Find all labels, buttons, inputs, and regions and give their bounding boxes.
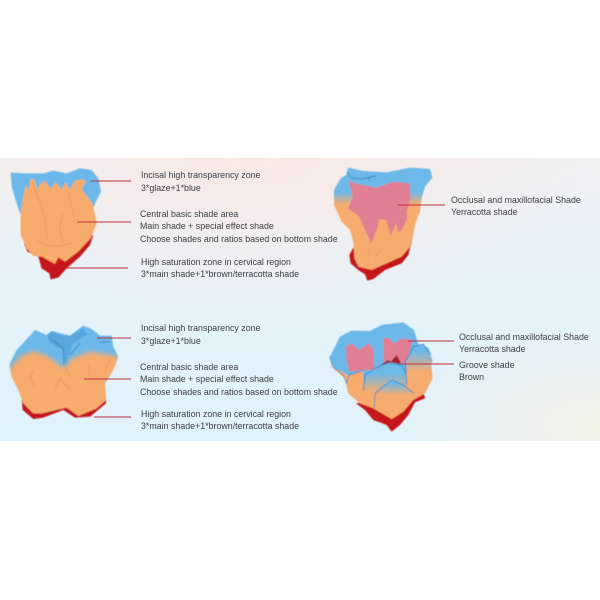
tooth body: [8, 325, 119, 417]
labels: bottom-left tooth, central zone: Main shade + special effect shade: [140, 374, 274, 384]
labels: top-right tooth: Yerracotta shade: [451, 207, 518, 217]
tooth body orange: [333, 355, 433, 419]
labels: bottom-left tooth, central zone: Choose shades and ratios based on bottom shade: [140, 387, 338, 397]
brown groove shade: [381, 355, 402, 365]
central orange zone: [21, 178, 97, 264]
pink occlusal zone: [348, 180, 411, 243]
labels: top-left tooth, central zone: Choose shades and ratios based on bottom shade: [140, 234, 338, 244]
labels: top-right tooth: Occlusal and maxillofacial Shade: [451, 195, 581, 205]
labels: bottom-left tooth, cervical zone: High saturation zone in cervical region: [141, 409, 291, 419]
lower lobe: [373, 380, 414, 419]
left lobe: [331, 360, 375, 408]
middle lobe: [363, 363, 407, 392]
cervical red zone: [349, 246, 411, 281]
leader lines: [66, 181, 454, 417]
blue grooves: [347, 172, 377, 181]
pink occlusal zones: [346, 338, 413, 372]
cervical red zone: [356, 392, 425, 432]
labels: top-left tooth, incisal zone: [141, 170, 261, 193]
cervical red zone: [17, 386, 106, 419]
tooth top blue: [330, 322, 433, 392]
orange grooves: [368, 248, 380, 258]
labels: bottom-left tooth, incisal zone: Incisal high transparency zone: [141, 323, 261, 333]
orange grooves: [30, 362, 110, 390]
labels: bottom-left tooth, central zone: Central basic shade area: [140, 362, 238, 372]
labels: bottom-left tooth, cervical zone: [141, 409, 299, 431]
labels: bottom-left tooth, central zone: [140, 362, 338, 397]
labels: top-left tooth, cervical zone: High saturation zone in cervical region: [141, 257, 291, 267]
labels: top-left tooth, cervical zone: [141, 257, 299, 279]
labels: bottom-left tooth, incisal zone: [141, 323, 261, 346]
incisal blue zone: [11, 168, 101, 213]
labels: bottom-right tooth, occlusal zone: [459, 332, 589, 354]
labels: bottom-right tooth, groove shade: Brown: [459, 372, 484, 382]
tooth 2: occlusal view: [334, 168, 432, 281]
labels: bottom-right tooth, occlusal zone: Yerracotta shade: [459, 344, 526, 354]
labels: top-left tooth, cervical zone: 3*main shade+1*brown/terracotta shade: [141, 269, 299, 279]
tooth body: [334, 168, 432, 270]
labels: top-left tooth, central zone: Central basic shade area: [140, 209, 238, 219]
right lobe: [406, 345, 433, 394]
tooth 1: incisal view: [11, 168, 101, 279]
tooth 3: molar incisal view: [8, 325, 119, 420]
darker blue fissure area: [47, 328, 87, 365]
labels: bottom-right tooth, occlusal zone: Occlusal and maxillofacial Shade: [459, 332, 589, 342]
labels: bottom-right tooth, groove shade: [459, 360, 515, 382]
background band: [0, 158, 600, 441]
cervical red zone: [24, 235, 93, 279]
orange mounds: [10, 348, 118, 417]
labels: top-left tooth, incisal zone: 3*glaze+1*blue: [141, 183, 201, 193]
labels: top-left tooth, central zone: [140, 209, 338, 244]
cusp ridge lines: [330, 344, 431, 408]
labels: bottom-left tooth, incisal zone: 3*glaze+1*blue: [141, 336, 201, 346]
labels: bottom-left tooth, cervical zone: 3*main shade+1*brown/terracotta shade: [141, 421, 299, 431]
labels: top-right tooth: [451, 195, 581, 217]
surface grooves: [32, 182, 74, 246]
labels: top-left tooth, central zone: Main shade + special effect shade: [140, 221, 274, 231]
fissure lines: [50, 338, 110, 365]
labels: top-left tooth, incisal zone: Incisal high transparency zone: [141, 170, 261, 180]
tooth 4: molar occlusal view: [330, 322, 433, 432]
labels: bottom-right tooth, groove shade: Groove shade: [459, 360, 515, 370]
